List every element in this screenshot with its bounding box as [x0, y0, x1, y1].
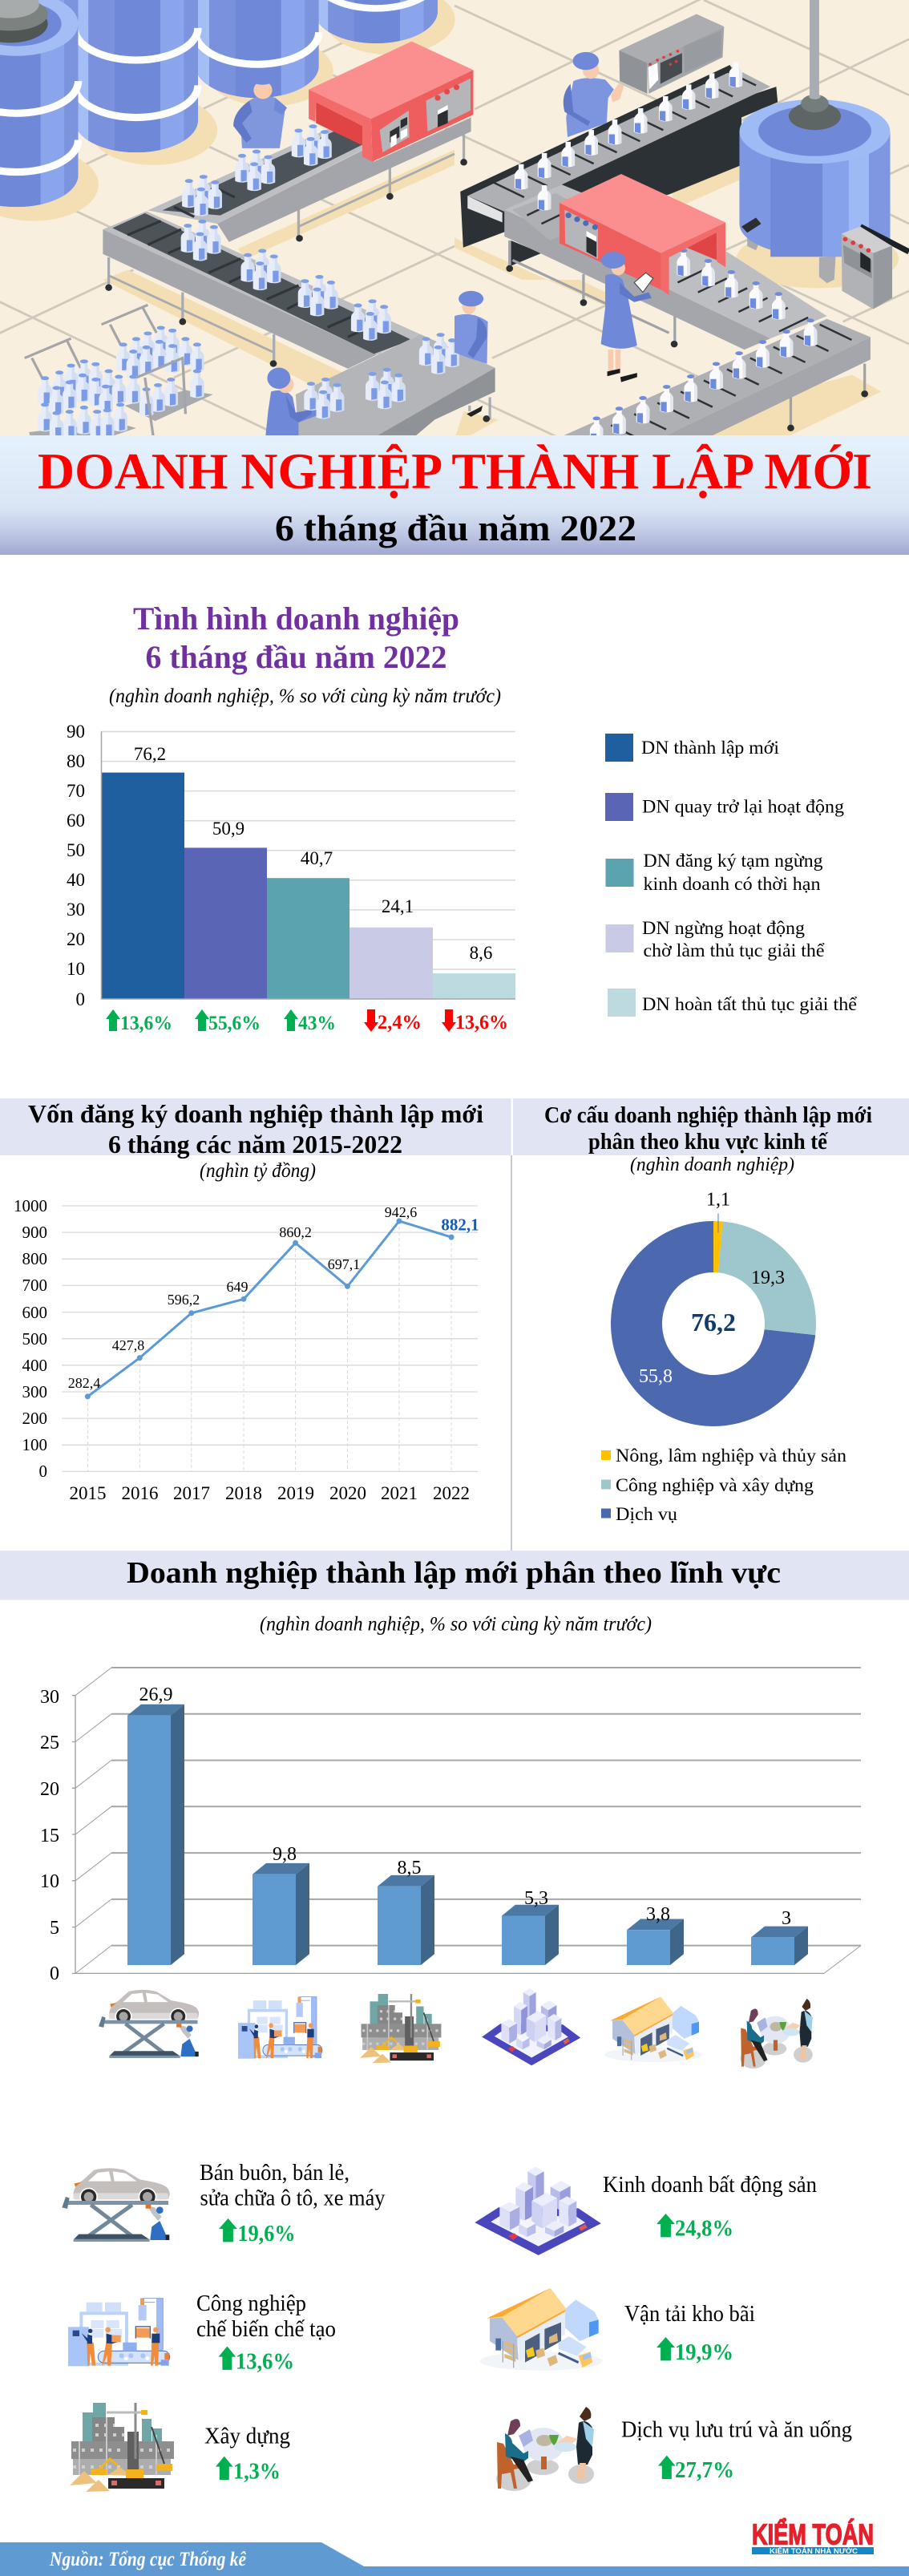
line chart: registered capital: 2016 — [122, 1483, 159, 1503]
year-on-year changes: 2,4% — [378, 1012, 422, 1033]
legend: business situation: DN hoàn tất thủ tục giải thể — [642, 994, 858, 1014]
panel: growth by field — [62, 2161, 852, 2492]
bar chart: business situation: 60 — [67, 811, 85, 831]
item: construction — [70, 2403, 290, 2492]
donut chart: economic sector — [611, 1190, 816, 1426]
line chart: registered capital: 2018 — [225, 1483, 262, 1503]
line chart: registered capital: 2019 — [277, 1483, 314, 1503]
heading band: registered capital: Vốn đăng ký doanh nghiệp thành lập mới — [28, 1099, 483, 1128]
line chart: registered capital: 882,1 — [441, 1215, 479, 1235]
item: manufacturing: chế biến chế tạo — [196, 2317, 336, 2342]
line chart: registered capital: 900 — [22, 1223, 47, 1242]
bar chart: business situation: 30 — [67, 900, 85, 920]
year-on-year changes: 13,6% — [455, 1012, 508, 1033]
item: manufacturing: Công nghiệp — [196, 2291, 306, 2316]
worker at right edge of table — [454, 291, 488, 364]
legend: business situation: DN đăng ký tạm ngừng — [643, 851, 823, 871]
3D bar chart: by field: 20 — [40, 1779, 59, 1800]
line chart: registered capital: 100 — [22, 1435, 47, 1454]
bar chart: business situation: 50,9 — [212, 819, 244, 839]
red machine, left line — [309, 42, 474, 162]
item: construction: Xây dựng — [204, 2424, 290, 2449]
worker at first conveyor — [233, 83, 287, 148]
subtitle: 6 tháng đầu năm 2022 — [275, 508, 636, 548]
logo: Kiểm Toán: KIỂM TOÁN NHÀ NƯỚC — [770, 2546, 858, 2555]
line chart: registered capital: 200 — [22, 1409, 47, 1428]
3D bar chart: by field: 0 — [50, 1963, 59, 1984]
line chart: registered capital: 2022 — [433, 1483, 470, 1503]
worker at table — [265, 367, 344, 439]
bar chart: business situation: 10 — [67, 959, 85, 979]
item: accommodation and food — [496, 2407, 852, 2491]
3D bar chart: by field: 3,8 — [646, 1904, 670, 1925]
3D bar chart: by field: 30 — [40, 1687, 59, 1708]
item: manufacturing: 13,6% — [236, 2349, 294, 2375]
title banner — [0, 435, 909, 555]
legend: economic sector: Nông, lâm nghiệp và thủy sản — [616, 1446, 847, 1466]
legend: business situation — [605, 734, 858, 1017]
line chart: registered capital: 1000 — [14, 1196, 47, 1215]
legend: business situation: chờ làm thủ tục giải thể — [643, 940, 825, 960]
icon: restaurant small — [740, 1999, 813, 2068]
bar chart: business situation: 0 — [75, 989, 85, 1009]
line chart: registered capital: 649 — [226, 1279, 248, 1295]
year-on-year changes: 13,6% — [120, 1013, 172, 1034]
item: retail and vehicle repair: 19,6% — [237, 2222, 295, 2246]
second conveyor with red machine — [504, 184, 871, 451]
item: real estate — [483, 2167, 817, 2250]
heading: business situation: 6 tháng đầu năm 2022 — [146, 639, 447, 675]
item: accommodation and food: Dịch vụ lưu trú và ăn uống — [621, 2418, 852, 2443]
mixing tank — [739, 0, 891, 283]
bar chart: business situation: 20 — [67, 929, 85, 949]
logo: Kiểm Toán — [752, 2517, 874, 2555]
line chart: registered capital: 2020 — [329, 1483, 366, 1503]
item: retail and vehicle repair — [62, 2161, 385, 2246]
line chart: registered capital: 700 — [22, 1276, 47, 1295]
gray filling machine conveyor — [460, 14, 778, 248]
3D bar chart: by field: 25 — [40, 1733, 59, 1753]
footer: source: Nguồn: Tổng cục Thống kê — [49, 2549, 247, 2570]
heading: business situation — [133, 601, 459, 675]
icon: construction small — [360, 1994, 441, 2063]
line chart: registered capital — [14, 1196, 479, 1503]
donut chart: economic sector: 76,2 — [691, 1308, 736, 1337]
logo: Kiểm Toán: KIỂM TOÁN — [752, 2517, 874, 2551]
3D bar chart: by field: 8,5 — [398, 1858, 422, 1878]
donut chart: economic sector: 55,8 — [639, 1366, 673, 1387]
item: retail and vehicle repair: sửa chữa ô tô, xe máy — [200, 2186, 385, 2211]
line chart: registered capital: 2015 — [69, 1483, 106, 1503]
bar chart: business situation: 80 — [67, 751, 85, 771]
icon row under chart — [99, 1988, 813, 2068]
3D bar chart: by field: 10 — [40, 1871, 59, 1892]
legend: economic sector: Công nghiệp và xây dựng — [616, 1475, 814, 1495]
icon: car repair small — [99, 1990, 199, 2058]
line chart: registered capital: 300 — [22, 1382, 47, 1401]
panel: by field — [0, 1551, 909, 2068]
legend: business situation: kinh doanh có thời hạn — [643, 874, 821, 894]
line chart: registered capital: 800 — [22, 1249, 47, 1268]
item: construction: 1,3% — [233, 2460, 281, 2485]
item: real estate: Kinh doanh bất động sản — [603, 2173, 817, 2198]
3D bar chart: by field: 3 — [782, 1908, 791, 1929]
worker with tablet — [601, 252, 653, 382]
red machine, right line — [560, 174, 725, 295]
bottle groups on left line — [181, 124, 459, 409]
control box — [842, 227, 909, 309]
3D bar chart: by field: 5 — [50, 1918, 59, 1939]
year-on-year changes — [106, 1009, 508, 1034]
heading band: by field: Doanh nghiệp thành lập mới phân theo lĩnh vực — [127, 1556, 781, 1590]
line chart: registered capital: 427,8 — [112, 1337, 144, 1353]
bar chart: business situation: 70 — [67, 781, 85, 801]
heading band: economic sector: Cơ cấu doanh nghiệp thành lập mới — [544, 1103, 872, 1128]
line chart: registered capital: 942,6 — [385, 1204, 417, 1220]
unit note: (nghìn doanh nghiệp, % so với cùng kỳ năm trước) — [109, 685, 501, 707]
bar chart: business situation: 40,7 — [301, 848, 333, 868]
item: retail and vehicle repair: Bán buôn, bán lẻ, — [200, 2161, 349, 2186]
icon: warehouse small — [604, 1997, 702, 2062]
legend: economic sector: Dịch vụ — [616, 1504, 678, 1524]
item: transport and warehousing — [479, 2288, 755, 2371]
line chart: registered capital: 500 — [22, 1329, 47, 1349]
donut chart: economic sector: 19,3 — [751, 1268, 785, 1288]
heading band: registered capital: 6 tháng các năm 2015-2022 — [108, 1130, 402, 1159]
3D bar chart: by field — [40, 1668, 861, 1984]
heading: business situation: Tình hình doanh nghiệp — [133, 601, 459, 637]
panel: business situation — [67, 601, 858, 1034]
line chart: registered capital: 697,1 — [328, 1256, 360, 1272]
donut chart: economic sector: 1,1 — [706, 1190, 730, 1211]
year-on-year changes: 43% — [298, 1013, 336, 1034]
heading band: economic sector — [513, 1098, 909, 1155]
year-on-year changes: 55,6% — [208, 1013, 261, 1034]
3D bar chart: by field: 26,9 — [139, 1684, 173, 1705]
bar chart: business situation — [67, 722, 515, 1009]
legend: business situation: DN thành lập mới — [641, 738, 779, 758]
item: transport and warehousing: Vận tải kho bãi — [624, 2302, 755, 2327]
legend: business situation: DN quay trở lại hoạt động — [642, 797, 845, 816]
bottle carts — [25, 305, 213, 445]
line chart: registered capital: 2021 — [381, 1483, 418, 1503]
line chart: registered capital: 2017 — [173, 1483, 210, 1503]
worker at filling machine — [564, 52, 624, 156]
3D bar chart: by field: 9,8 — [273, 1844, 297, 1865]
line chart: registered capital: 860,2 — [279, 1224, 312, 1240]
line chart: registered capital: 0 — [38, 1462, 47, 1481]
bar chart: business situation: 40 — [67, 870, 85, 890]
line chart: registered capital: 600 — [22, 1303, 47, 1322]
bar chart: business situation: 24,1 — [382, 896, 414, 916]
bar chart: business situation: 90 — [67, 722, 85, 742]
storage drums — [0, 0, 438, 211]
bar chart: business situation: 76,2 — [134, 744, 166, 764]
item: real estate: 24,8% — [675, 2217, 733, 2242]
panel: registered capital — [0, 1098, 511, 1503]
bar chart: business situation: 50 — [67, 840, 85, 860]
line chart: registered capital: 596,2 — [168, 1292, 200, 1308]
heading band: by field — [0, 1551, 909, 1600]
icon: factory small — [238, 1997, 322, 2059]
line chart: registered capital: 282,4 — [68, 1375, 100, 1391]
footer: source — [0, 2542, 909, 2576]
bar chart: business situation: 8,6 — [470, 943, 492, 963]
item: accommodation and food: 27,7% — [675, 2458, 734, 2483]
heading band: economic sector: phân theo khu vực kinh tế — [588, 1130, 828, 1155]
left conveyor lines — [103, 116, 495, 439]
main title: DOANH NGHIỆP THÀNH LẬP MỚI — [38, 443, 872, 499]
legend: business situation: DN ngừng hoạt động — [642, 918, 806, 938]
unit note: (nghìn doanh nghiệp, % so với cùng kỳ năm trước) — [260, 1614, 652, 1636]
item: transport and warehousing: 19,9% — [675, 2340, 733, 2365]
icon: real estate small — [488, 1988, 574, 2061]
panel: structure by economic sector — [513, 1098, 909, 1524]
3D bar chart: by field: 15 — [40, 1826, 59, 1846]
3D bar chart: by field: 5,3 — [524, 1888, 548, 1909]
line chart: registered capital: 400 — [22, 1356, 47, 1375]
legend: economic sector — [601, 1446, 847, 1524]
unit note: (nghìn tỷ đồng) — [200, 1160, 316, 1182]
illustration: factory production line — [0, 0, 909, 455]
item: manufacturing — [68, 2291, 336, 2375]
unit note: (nghìn doanh nghiệp) — [630, 1155, 794, 1175]
heading band: registered capital — [0, 1098, 511, 1159]
